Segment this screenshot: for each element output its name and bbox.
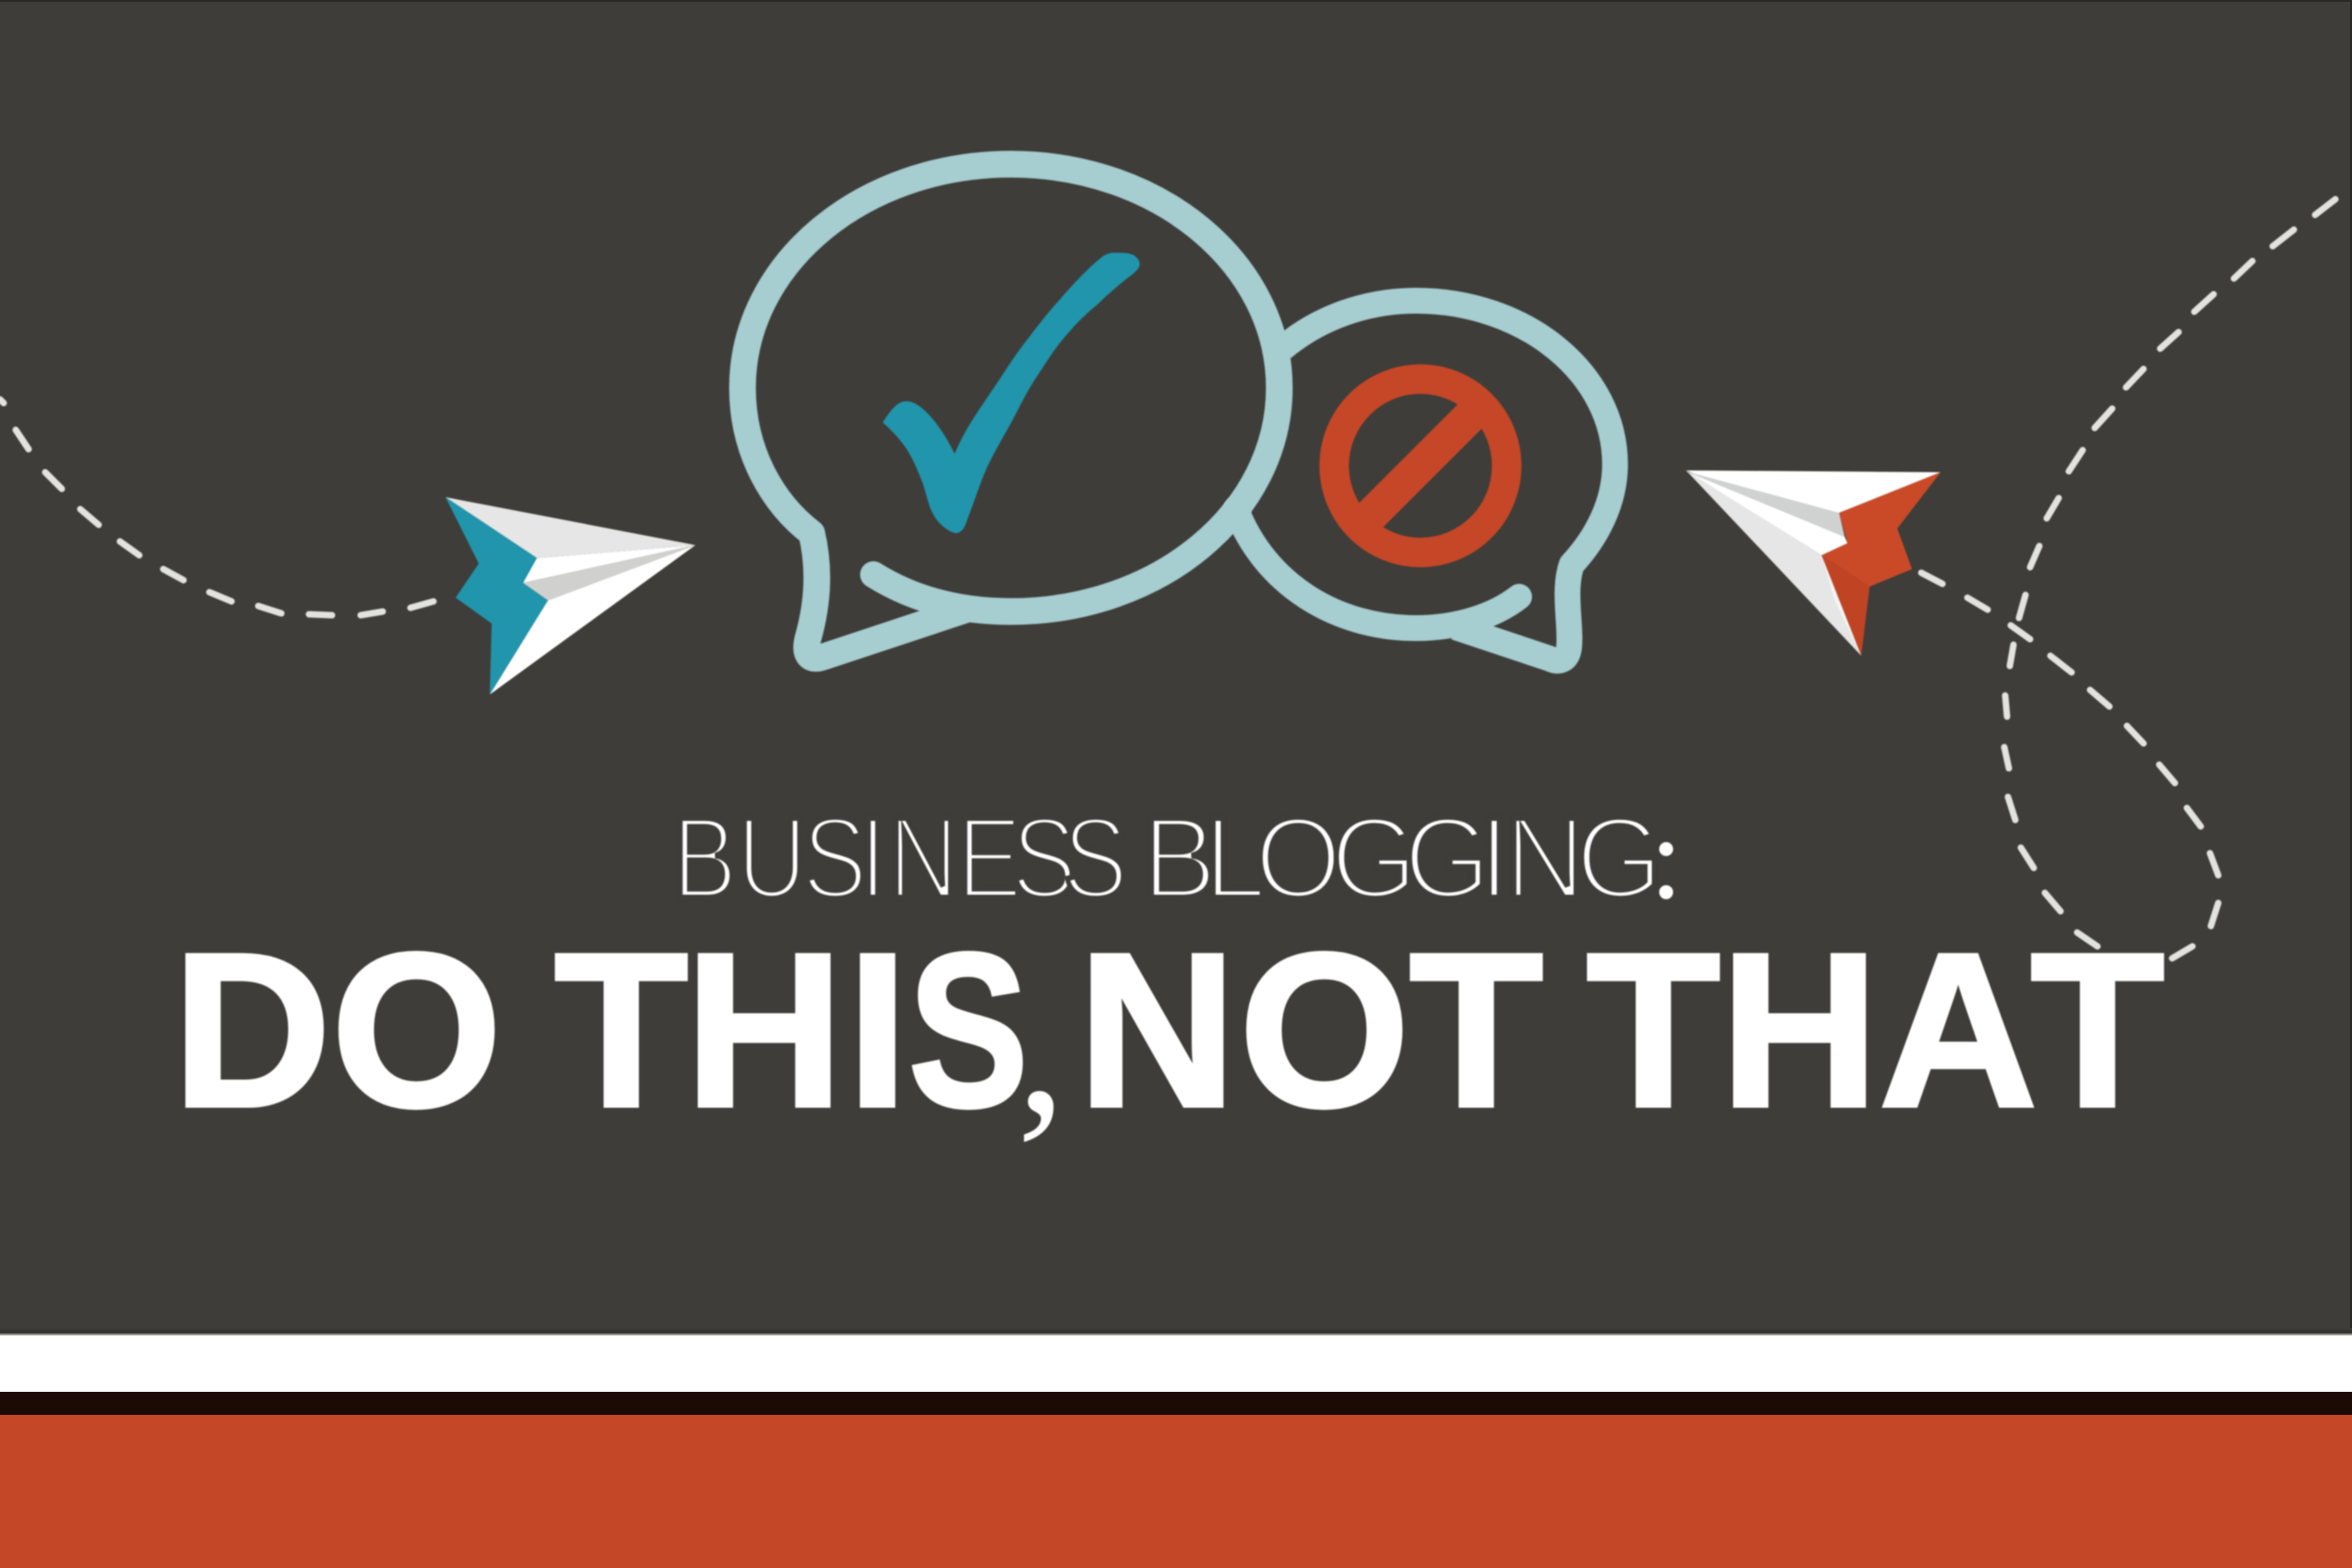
black band (0, 1392, 2352, 1415)
heading: do this, not that (172, 909, 2165, 1155)
heading: do this, not that: S (909, 909, 1028, 1153)
heading: do this, not that: DO (172, 909, 502, 1153)
dashed flight path: right plane (1921, 199, 2335, 958)
icon: no symbol (1334, 379, 1507, 552)
white band (0, 1336, 2352, 1392)
icon: check mark (883, 253, 1140, 533)
dashed flight path: left plane (0, 399, 434, 615)
heading: do this, not that: THI (554, 909, 909, 1153)
heading: do this, not that: NOT (1078, 909, 1543, 1153)
heading: do this, not that: THAT (1586, 909, 2165, 1153)
icon: small speech bubble (1236, 301, 1615, 660)
heading: do this, not that: , (1016, 934, 1066, 1155)
heading: business blogging: BUSINESS (672, 794, 1128, 922)
icon: right paper plane (red) (1686, 470, 1941, 656)
red band (0, 1415, 2352, 1568)
heading: business blogging: BLOGGING (1142, 794, 1663, 922)
heading: business blogging: : (1650, 792, 1682, 923)
heading: business blogging (672, 792, 1682, 923)
icon: left paper plane (teal) (445, 497, 695, 695)
icon: large speech bubble (742, 164, 1279, 659)
